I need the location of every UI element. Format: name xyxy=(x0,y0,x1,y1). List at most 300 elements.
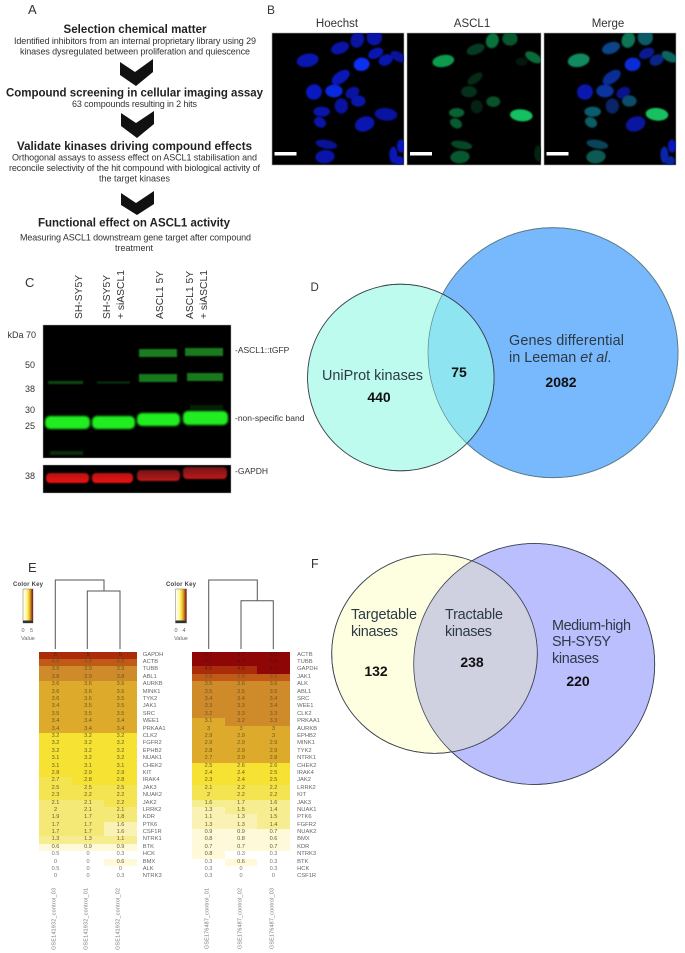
step 4 text: Measuring ASCL1 downstream gene target after compound xyxy=(20,232,251,242)
heatmap: GSE141932 xyxy=(39,652,166,879)
label: Leeman genes: 2082 xyxy=(545,374,577,390)
heatmap: GSE176487: 3.5 xyxy=(237,689,245,695)
heatmap: GSE176487: LRRK2 xyxy=(297,785,316,791)
heatmap: GSE141932: 0 xyxy=(54,859,57,865)
heatmap: GSE141932: 3.2 xyxy=(117,748,124,754)
heatmap: GSE141932: 2.8 xyxy=(84,777,92,783)
heatmap: GSE176487: 4.7 xyxy=(237,659,245,665)
heatmap: GSE176487: 0.3 xyxy=(270,859,277,865)
heatmap: GSE141932: 3.2 xyxy=(52,733,59,739)
heatmap: GSE141932: 5 xyxy=(86,652,90,658)
colour key, left heatmap: 0 xyxy=(22,628,25,634)
heatmap: GSE141932: 0 xyxy=(86,859,90,865)
heatmap: GSE176487: 0.7 xyxy=(237,844,245,850)
heatmap: GSE176487: 2.2 xyxy=(270,785,277,791)
lane labels: SH-SY5Y xyxy=(102,275,113,319)
label: medium-high SH-SY5Y kinases: 220 xyxy=(566,673,590,689)
heatmap: GSE141932: 3.9 xyxy=(84,674,92,680)
heatmap: GSE176487: 4.8 xyxy=(270,659,277,665)
label: tractable kinases: Tractable xyxy=(445,607,503,623)
heatmap: GSE141932: 3.2 xyxy=(52,740,59,746)
molecular weight markers: 38 xyxy=(25,471,35,481)
heatmap: GSE176487: 2.9 xyxy=(237,733,245,739)
heatmap: GSE176487: WEE1 xyxy=(297,703,314,709)
heatmap: GSE141932: 2.9 xyxy=(117,770,124,776)
step 3 text xyxy=(9,141,260,184)
heatmap: GSE141932: 0.9 xyxy=(117,844,124,850)
heatmap: GSE176487: 3 xyxy=(272,726,275,732)
heatmap: GSE141932: 3.1 xyxy=(52,763,59,769)
heatmap: GSE176487: 1.3 xyxy=(237,814,245,820)
heatmap: GSE141932: 1.1 xyxy=(117,836,124,842)
heatmap: GSE176487: 0.6 xyxy=(237,859,245,865)
heatmap: GSE176487: TUBB xyxy=(297,659,313,665)
step 4 text: Functional effect on ASCL1 activity xyxy=(38,218,231,230)
heatmap: GSE176487: NTRK3 xyxy=(297,851,316,857)
heatmap: GSE176487: ACTB xyxy=(297,652,313,658)
label: tractable kinases xyxy=(445,607,503,670)
label: tractable kinases: kinases xyxy=(445,624,492,640)
heatmap: GSE176487: 3.2 xyxy=(205,711,212,717)
molecular weight markers: 50 xyxy=(25,360,35,370)
heatmap: GSE176487: AURKB xyxy=(297,726,317,732)
band labels: -GAPDH xyxy=(235,466,268,476)
heatmap: GSE176487: EPHB2 xyxy=(297,733,316,739)
column titles: ASCL1 xyxy=(454,18,490,30)
heatmap: GSE141932: 3.2 xyxy=(84,748,92,754)
label: medium-high SH-SY5Y kinases: kinases xyxy=(552,651,599,667)
label: targetable kinases xyxy=(351,607,417,679)
heatmap: GSE176487: 0 xyxy=(239,866,243,872)
heatmap: GSE176487: 0.7 xyxy=(270,829,277,835)
heatmap: GSE141932: 1.9 xyxy=(52,814,59,820)
panel E: kinase expression heatmaps xyxy=(13,560,320,950)
heatmap: GSE176487: MINK1 xyxy=(297,740,315,746)
micrograph: ASCL1 xyxy=(407,31,543,165)
blot: GAPDH red channel xyxy=(43,465,231,493)
heatmap: GSE141932: JAK1 xyxy=(143,703,157,709)
heatmap: GSE141932: 1.3 xyxy=(52,836,59,842)
lane labels xyxy=(74,270,210,319)
heatmap: GSE141932: 4.8 xyxy=(117,659,124,665)
label: medium-high SH-SY5Y kinases xyxy=(552,618,631,689)
circle: targetable kinases xyxy=(332,554,537,753)
heatmap: GSE176487: 2.2 xyxy=(270,792,277,798)
heatmap: GSE141932: 1.7 xyxy=(52,822,59,828)
heatmap: GSE176487: FGFR2 xyxy=(297,822,316,828)
heatmap: GSE141932: 2.7 xyxy=(52,777,59,783)
heatmap: GSE176487: 4.7 xyxy=(205,659,212,665)
heatmap: GSE176487: 0.3 xyxy=(237,851,245,857)
heatmap: GSE141932: 1.3 xyxy=(84,836,92,842)
sample labels, right heatmap: GSE176487_control_03 xyxy=(270,888,276,949)
label: medium-high SH-SY5Y kinases: SH-SY5Y xyxy=(552,634,611,650)
heatmap: GSE141932: NTRK1 xyxy=(143,836,162,842)
heatmap: GSE141932: 3.1 xyxy=(52,755,59,761)
heatmap: GSE176487: SRC xyxy=(297,696,309,702)
heatmap: GSE141932: NUAK2 xyxy=(143,792,162,798)
heatmap: GSE176487: 0.8 xyxy=(205,836,212,842)
step 1 text: Identified inhibitors from an internal proprietary library using 29 xyxy=(14,36,256,46)
label: Leeman genes: in Leeman et al. xyxy=(509,350,611,366)
heatmap: GSE176487: 1.3 xyxy=(205,822,212,828)
panel letter E: E xyxy=(28,560,37,575)
heatmap: GSE141932: 2.9 xyxy=(84,770,92,776)
heatmap: GSE141932: 0.3 xyxy=(117,873,124,879)
heatmap: GSE141932: 2.2 xyxy=(117,792,124,798)
heatmap: GSE141932: 3.2 xyxy=(84,755,92,761)
panel letter D: D xyxy=(310,282,319,294)
heatmap: GSE141932: 0.6 xyxy=(117,859,124,865)
panel A: screening workflow xyxy=(6,2,264,253)
heatmap: GSE176487: 2.9 xyxy=(270,748,277,754)
heatmap: GSE176487: ALK xyxy=(297,681,308,687)
heatmap: GSE141932: 1.7 xyxy=(84,829,92,835)
heatmap: GSE176487: 3.3 xyxy=(270,711,277,717)
heatmap: GSE176487: TYK2 xyxy=(297,748,312,754)
heatmap: GSE176487: 2 xyxy=(207,792,210,798)
circle: medium-high SH-SY5Y kinases xyxy=(414,544,655,784)
heatmap: GSE141932: 3.6 xyxy=(52,689,59,695)
heatmap: GSE141932: 3.4 xyxy=(52,703,59,709)
sample labels, right heatmap: GSE176487_control_01 xyxy=(205,888,211,949)
heatmap: GSE141932: 3.4 xyxy=(117,718,124,724)
heatmap: GSE176487: 4.7 xyxy=(270,666,277,672)
heatmap: GSE176487: 0.6 xyxy=(270,836,277,842)
heatmap: GSE141932: 1.6 xyxy=(117,829,124,835)
heatmap: GSE176487: KIT xyxy=(297,792,306,798)
arrow: chevron 3 xyxy=(121,191,154,215)
heatmap: GSE176487: CLK2 xyxy=(297,711,312,717)
heatmap: GSE176487: GAPDH xyxy=(297,666,318,672)
heatmap: GSE141932: CSF1R xyxy=(143,829,162,835)
heatmap: GSE141932: 1.8 xyxy=(117,814,124,820)
step 3 text: Orthogonal assays to assess effect on ASCL1 stabilisation and xyxy=(12,152,257,162)
heatmap: GSE176487: KDR xyxy=(297,844,309,850)
heatmap: GSE176487: 3.4 xyxy=(270,696,277,702)
heatmap: GSE141932: 0 xyxy=(86,873,90,879)
heatmap: GSE176487: 3.3 xyxy=(205,703,212,709)
heatmap: GSE176487: 0.9 xyxy=(237,829,245,835)
label: targetable kinases: Targetable xyxy=(351,607,417,623)
molecular weight markers: 38 xyxy=(25,384,35,394)
heatmap: GSE176487: 0.3 xyxy=(270,851,277,857)
heatmap: GSE141932: 0.5 xyxy=(52,866,59,872)
blot: ASCL1 antibody green channel xyxy=(43,325,231,458)
heatmap: GSE141932: PRKAA1 xyxy=(143,726,166,732)
heatmap: GSE141932: 0.6 xyxy=(52,844,59,850)
heatmap: GSE141932: 3.9 xyxy=(52,666,59,672)
heatmap: GSE141932: 2.8 xyxy=(52,770,59,776)
heatmap: GSE176487: 0.3 xyxy=(270,866,277,872)
heatmap: GSE176487: 0 xyxy=(239,873,243,879)
heatmap: GSE176487: NUAK1 xyxy=(297,807,316,813)
heatmap: GSE141932: MINK1 xyxy=(143,689,160,695)
sample labels, left heatmap: GSE141932_control_03 xyxy=(51,888,57,950)
heatmap: GSE176487: 2.8 xyxy=(270,755,277,761)
heatmap: GSE176487: 2.6 xyxy=(270,763,277,769)
label: targetable kinases: kinases xyxy=(351,624,398,640)
heatmap: GSE176487: 2.9 xyxy=(205,733,212,739)
heatmap: GSE141932: 4.8 xyxy=(84,659,92,665)
heatmap: GSE141932: JAK3 xyxy=(143,785,157,791)
heatmap: GSE141932: 0 xyxy=(119,866,122,872)
heatmap: GSE141932: 3.1 xyxy=(117,763,124,769)
heatmap: GSE176487: 3.3 xyxy=(270,718,277,724)
heatmap: GSE141932: 3.6 xyxy=(117,681,124,687)
step 2 text: Compound screening in cellular imaging assay xyxy=(6,88,264,100)
heatmap: GSE141932: 3.4 xyxy=(52,726,59,732)
circle: Leeman genes xyxy=(428,228,678,478)
label: UniProt kinases: UniProt kinases xyxy=(322,368,423,384)
heatmap: GSE141932: 1.7 xyxy=(52,829,59,835)
lane labels: ASCL1 5Y xyxy=(185,271,196,319)
heatmap: GSE141932: TYK2 xyxy=(143,696,157,702)
heatmap: GSE176487: 3.9 xyxy=(270,674,277,680)
heatmap: GSE176487: 1.5 xyxy=(237,807,245,813)
heatmap: GSE176487: 3.6 xyxy=(237,681,245,687)
heatmap: GSE141932: 2.3 xyxy=(52,792,59,798)
arrow: chevron 2 xyxy=(121,111,154,138)
heatmap: GSE141932: 3.5 xyxy=(117,703,124,709)
heatmap: GSE176487: 3.3 xyxy=(237,703,245,709)
heatmap: GSE141932: NUAK1 xyxy=(143,755,162,761)
heatmap: GSE176487 xyxy=(192,652,320,879)
heatmap: GSE141932: 0 xyxy=(86,866,90,872)
heatmap: GSE176487: 3.1 xyxy=(205,718,212,724)
heatmap: GSE176487: 2.1 xyxy=(205,785,212,791)
heatmap: GSE176487: PRKAA1 xyxy=(297,718,320,724)
heatmap: GSE176487: 1.5 xyxy=(270,814,277,820)
heatmap: GSE176487: 2.4 xyxy=(237,770,245,776)
heatmap: GSE141932: 3.5 xyxy=(117,696,124,702)
heatmap: GSE176487: 1.7 xyxy=(237,800,245,806)
heatmap: GSE176487: 2.9 xyxy=(205,740,212,746)
sample labels, right heatmap xyxy=(205,888,276,949)
heatmap: GSE141932: LRRK2 xyxy=(143,807,161,813)
heatmap: GSE141932: 2.1 xyxy=(117,807,124,813)
heatmap: GSE176487: 2.5 xyxy=(270,777,277,783)
colour key, left heatmap: Value xyxy=(21,636,35,642)
panel letter C: C xyxy=(25,275,34,290)
colour key, left heatmap: 5 xyxy=(30,628,33,634)
heatmap: GSE141932: 3.5 xyxy=(84,711,92,717)
heatmap: GSE176487: 2.7 xyxy=(205,755,212,761)
label: medium-high SH-SY5Y kinases: Medium-high xyxy=(552,618,631,634)
heatmap: GSE141932: BMX xyxy=(143,859,155,865)
heatmap: GSE141932: SRC xyxy=(143,711,155,717)
heatmap: GSE141932: 2.8 xyxy=(117,777,124,783)
heatmap: GSE141932: 3.4 xyxy=(84,726,92,732)
heatmap: GSE141932: 3.2 xyxy=(84,740,92,746)
heatmap: GSE141932: 3.4 xyxy=(84,718,92,724)
step 3 text: reconcile selectivity of the hit compound with biological activity of xyxy=(9,163,260,173)
heatmap: GSE141932: 3.1 xyxy=(84,763,92,769)
heatmap: GSE176487: 2.9 xyxy=(270,740,277,746)
heatmap: GSE141932: 3.6 xyxy=(84,696,92,702)
label: UniProt kinases xyxy=(322,368,423,405)
heatmap: GSE176487: 0 xyxy=(272,873,275,879)
heatmap: GSE176487: JAK2 xyxy=(297,777,311,783)
heatmap: GSE176487: 4.7 xyxy=(237,652,245,658)
sample labels, right heatmap: GSE176487_control_02 xyxy=(237,888,243,949)
heatmap: GSE141932: 3.2 xyxy=(52,748,59,754)
heatmap: GSE141932: HCK xyxy=(143,851,155,857)
heatmap: GSE176487: 3.4 xyxy=(270,703,277,709)
sample labels, left heatmap: GSE141932_control_01 xyxy=(83,888,89,950)
heatmap: GSE176487: 2.9 xyxy=(237,755,245,761)
label: targetable kinases: 132 xyxy=(364,663,388,679)
heatmap: GSE141932: JAK2 xyxy=(143,800,157,806)
circle: UniProt kinases xyxy=(308,284,494,471)
heatmap: GSE176487: 3.5 xyxy=(205,681,212,687)
heatmap: GSE141932: 3.4 xyxy=(117,726,124,732)
heatmap: GSE176487: 2.2 xyxy=(237,785,245,791)
arrow: chevron 1 xyxy=(120,59,153,86)
heatmap: GSE141932: 0 xyxy=(86,851,90,857)
heatmap: GSE176487: HCK xyxy=(297,866,309,872)
heatmap: GSE141932: 3.8 xyxy=(117,674,124,680)
heatmap: GSE141932: 2.1 xyxy=(84,807,92,813)
panel letter A: A xyxy=(28,2,37,17)
heatmap: GSE176487: 0.3 xyxy=(205,873,212,879)
heatmap: GSE176487: 2.4 xyxy=(237,777,245,783)
heatmap: GSE141932: 1.6 xyxy=(117,822,124,828)
heatmap: GSE141932: 2.1 xyxy=(84,800,92,806)
heatmap: GSE141932: KDR xyxy=(143,814,155,820)
heatmap: GSE141932: 0.5 xyxy=(52,851,59,857)
heatmap: GSE176487: 2.3 xyxy=(205,777,212,783)
heatmap: GSE141932: 5 xyxy=(119,652,122,658)
heatmap: GSE176487: BTK xyxy=(297,859,308,865)
band labels: -ASCL1::tGFP xyxy=(235,345,290,355)
step 4 text: treatment xyxy=(115,243,153,253)
colour key, right heatmap: Color Key xyxy=(166,582,197,588)
molecular weight markers: kDa 70 xyxy=(7,330,36,340)
heatmap: GSE141932: GAPDH xyxy=(143,652,163,658)
heatmap: GSE176487: NUAK2 xyxy=(297,829,316,835)
heatmap: GSE141932: 2.5 xyxy=(52,785,59,791)
heatmap: GSE141932: IRAK4 xyxy=(143,777,159,783)
heatmap: GSE176487: 1.4 xyxy=(270,822,277,828)
step 2 text xyxy=(6,88,264,109)
heatmap: GSE176487: 2.6 xyxy=(237,763,245,769)
column titles xyxy=(316,18,624,30)
step 4 text xyxy=(20,218,251,253)
heatmap: GSE141932: 0.3 xyxy=(117,851,124,857)
heatmap: GSE141932: ABL1 xyxy=(143,674,157,680)
heatmap: GSE176487: 4.5 xyxy=(237,666,245,672)
panel D: Venn diagram of UniProt kinases and Leeman genes xyxy=(307,227,678,478)
heatmap: GSE141932: 3.2 xyxy=(117,740,124,746)
label: Leeman genes: Genes differential xyxy=(509,333,624,349)
scale bar xyxy=(410,152,432,156)
heatmap: GSE141932: 3.9 xyxy=(117,666,124,672)
heatmap: GSE176487: 4.5 xyxy=(205,666,212,672)
step 1 text: kinases dysregulated between proliferation and quiescence xyxy=(20,46,250,56)
colour key, right heatmap: Value xyxy=(174,636,188,642)
scale bar xyxy=(274,152,296,156)
heatmap: GSE176487: CHEK2 xyxy=(297,763,316,769)
dendrogram, left heatmap xyxy=(55,580,120,649)
step 2 text: 63 compounds resulting in 2 hits xyxy=(72,99,198,109)
column titles: Merge xyxy=(592,18,624,30)
heatmap: GSE141932: 3.9 xyxy=(84,666,92,672)
heatmap: GSE176487: 4.7 xyxy=(205,652,212,658)
heatmap: GSE176487: 1.6 xyxy=(205,800,212,806)
sample labels, left heatmap xyxy=(51,888,121,950)
heatmap: GSE176487: 3 xyxy=(239,726,243,732)
heatmap: GSE141932: 3.6 xyxy=(84,689,92,695)
step 1 text: Selection chemical matter xyxy=(64,24,207,36)
heatmap: GSE176487: CSF1R xyxy=(297,873,316,879)
heatmap: GSE141932: 3.6 xyxy=(117,689,124,695)
heatmap: GSE141932: TUBB xyxy=(143,666,158,672)
heatmap: GSE141932: 2.5 xyxy=(117,785,124,791)
band labels xyxy=(235,345,305,476)
heatmap: GSE141932: CLK2 xyxy=(143,733,157,739)
lane labels: + siASCL1 xyxy=(116,270,127,319)
colour key, left heatmap xyxy=(13,582,44,642)
heatmap: GSE176487: 3.5 xyxy=(270,689,277,695)
heatmap: GSE141932: EPHB2 xyxy=(143,748,162,754)
panel F: Venn diagram of targetable and SH-SY5Y kinases xyxy=(311,543,656,785)
heatmap: GSE176487: 0.7 xyxy=(205,844,212,850)
heatmap: GSE141932: 0 xyxy=(54,873,57,879)
heatmap: GSE176487: JAK1 xyxy=(297,674,311,680)
heatmap: GSE141932: 3.6 xyxy=(84,681,92,687)
heatmap: GSE141932: 1.7 xyxy=(84,814,92,820)
overlap region xyxy=(332,544,655,784)
colour key, left heatmap: Color Key xyxy=(13,582,44,588)
heatmap: GSE176487: 0.9 xyxy=(205,829,212,835)
heatmap: GSE176487: 0.3 xyxy=(205,866,212,872)
heatmap: GSE141932: KIT xyxy=(143,770,152,776)
colour key, right heatmap xyxy=(166,582,197,642)
heatmap: GSE176487: 3.4 xyxy=(237,696,245,702)
heatmap: GSE141932: 2.5 xyxy=(84,785,92,791)
heatmap: GSE176487: 2.8 xyxy=(205,748,212,754)
heatmap: GSE176487: 2.9 xyxy=(237,748,245,754)
heatmap: GSE141932: 3.8 xyxy=(52,674,59,680)
heatmap: GSE176487: 0.7 xyxy=(270,844,277,850)
heatmap: GSE176487: 1.1 xyxy=(205,814,212,820)
heatmap: GSE176487: 0.3 xyxy=(205,859,212,865)
step 1 text xyxy=(14,24,256,56)
heatmap: GSE141932: 3.6 xyxy=(52,696,59,702)
heatmap: GSE176487: 2.5 xyxy=(270,770,277,776)
heatmap: GSE176487: 2.9 xyxy=(237,740,245,746)
heatmap: GSE141932: WEE1 xyxy=(143,718,159,724)
scale bar xyxy=(546,152,568,156)
heatmap: GSE141932: ACTB xyxy=(143,659,158,665)
heatmap: GSE141932: 4.8 xyxy=(52,659,59,665)
heatmap: GSE176487: 3.3 xyxy=(237,711,245,717)
heatmap: GSE176487: 1.6 xyxy=(270,800,277,806)
heatmap: GSE141932: BTK xyxy=(143,844,154,850)
heatmap: GSE141932: 3.2 xyxy=(117,733,124,739)
heatmap: GSE176487: 2.4 xyxy=(205,770,212,776)
colour key, right heatmap: 4 xyxy=(182,628,186,634)
lane labels: SH-SY5Y xyxy=(74,275,85,319)
heatmap: GSE141932: 1.7 xyxy=(84,822,92,828)
heatmap: GSE141932: 3.5 xyxy=(84,703,92,709)
micrograph: Hoechst xyxy=(272,29,408,165)
heatmap: GSE176487: NTRK1 xyxy=(297,755,316,761)
heatmap: GSE141932: PTK6 xyxy=(143,822,157,828)
label: Leeman genes xyxy=(509,333,624,390)
heatmap: GSE176487: 1.3 xyxy=(237,822,245,828)
